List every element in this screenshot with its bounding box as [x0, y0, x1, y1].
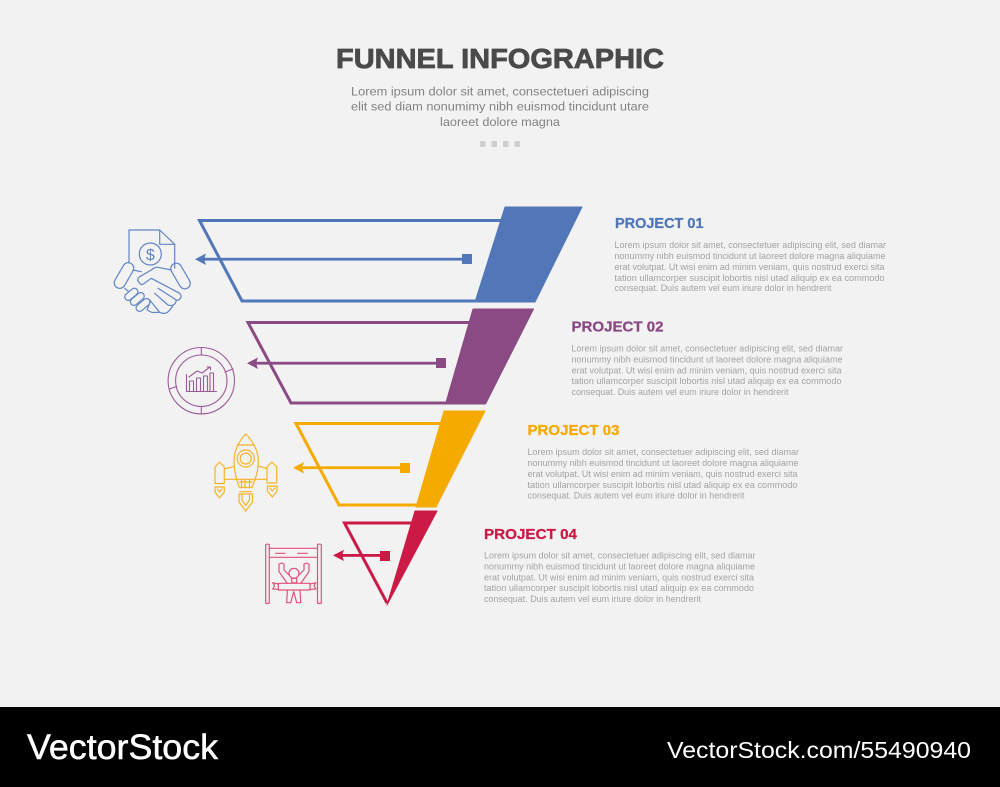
arrow 4 [333, 550, 390, 561]
arrow 3 [293, 462, 410, 474]
text block: project 02: Lorem ipsum dolor sit amet, consectetuer adipiscing elit, sed diamar [572, 344, 843, 354]
text block: project 02: erat volutpat. Ut wisi enim ad minim veniam, quis nostrud exerci sita [572, 366, 842, 376]
text block: project 01: Lorem ipsum dolor sit amet, consectetuer adipiscing elit, sed diamar [614, 240, 886, 250]
footer url: VectorStock.com/55490940 [667, 737, 971, 763]
page indicator dots [480, 141, 520, 147]
text block: project 04: tation ullamcorper suscipit lobortis nisl utad aliquip ex ea commodo [484, 583, 754, 593]
subtitle: elit sed diam nonumimy nibh euismod tincidunt utare [351, 100, 649, 114]
text block: project 04: consequat. Duis autem vel eum iriure dolor in hendrerit [484, 594, 702, 604]
arrow 1 [195, 254, 472, 265]
subtitle [351, 84, 649, 129]
funnel stage 4 [333, 511, 437, 605]
text block: project 04: nonummy nibh euismod tincidunt ut laoreet dolore magna aliquiame [484, 562, 755, 572]
text block: project 01 [614, 215, 886, 293]
footer logo: VectorStock [27, 728, 219, 767]
text block: project 02: tation ullamcorper suscipit lobortis nisl utad aliquip ex ea commodo [572, 376, 842, 386]
text block: project 02: PROJECT 02 [572, 318, 664, 336]
text block: project 02 [572, 318, 843, 397]
title: FUNNEL INFOGRAPHIC [336, 43, 664, 74]
icon: chart in ring [168, 348, 234, 414]
icon: finish line [266, 544, 321, 604]
text block: project 03: tation ullamcorper suscipit lobortis nisl utad aliquip ex ea commodo [528, 480, 798, 490]
text block: project 01: consequat. Duis autem vel eum iriure dolor in hendrerit [614, 283, 832, 293]
funnel stage 2 [247, 309, 534, 404]
text block: project 01: erat volutpat. Ut wisi enim ad minim veniam, quis nostrud exerci sita [614, 262, 885, 272]
text block: project 03: PROJECT 03 [528, 422, 620, 439]
icon: handshake with dollar document: $ [146, 247, 155, 264]
icon: rocket [215, 434, 277, 511]
text block: project 03: erat volutpat. Ut wisi enim ad minim veniam, quis nostrud exerci sita [528, 469, 798, 479]
text block: project 04: PROJECT 04 [484, 526, 578, 543]
text block: project 03 [528, 422, 799, 500]
text block: project 04 [484, 526, 756, 604]
arrow 2 [247, 358, 446, 369]
text block: project 01: PROJECT 01 [615, 215, 704, 232]
text block: project 04: erat volutpat. Ut wisi enim ad minim veniam, quis nostrud exerci sita [484, 572, 754, 582]
funnel stage 1 [195, 207, 582, 302]
text block: project 03: Lorem ipsum dolor sit amet, consectetuer adipiscing elit, sed diamar [528, 447, 799, 457]
subtitle: Lorem ipsum dolor sit amet, consectetueri adipiscing [351, 84, 649, 98]
text block: project 03: nonummy nibh euismod tincidunt ut laoreet dolore magna aliquiame [528, 458, 799, 468]
text block: project 01: nonummy nibh euismod tincidunt ut laoreet dolore magna aliquiame [614, 251, 886, 261]
text block: project 02: consequat. Duis autem vel eum iriure dolor in hendrerit [572, 387, 789, 397]
text block: project 04: Lorem ipsum dolor sit amet, consectetuer adipiscing elit, sed diamar [484, 550, 756, 560]
text block: project 02: nonummy nibh euismod tincidunt ut laoreet dolore magna aliquiame [572, 354, 843, 364]
icon: handshake with dollar document [112, 230, 192, 313]
funnel stage 3 [293, 411, 485, 507]
subtitle: laoreet dolore magna [440, 115, 560, 129]
text block: project 01: tation ullamcorper suscipit lobortis nisl utad aliquip ex ea commodo [614, 273, 885, 283]
text block: project 03: consequat. Duis autem vel eum iriure dolor in hendrerit [528, 490, 745, 500]
footer bar [0, 707, 1000, 787]
